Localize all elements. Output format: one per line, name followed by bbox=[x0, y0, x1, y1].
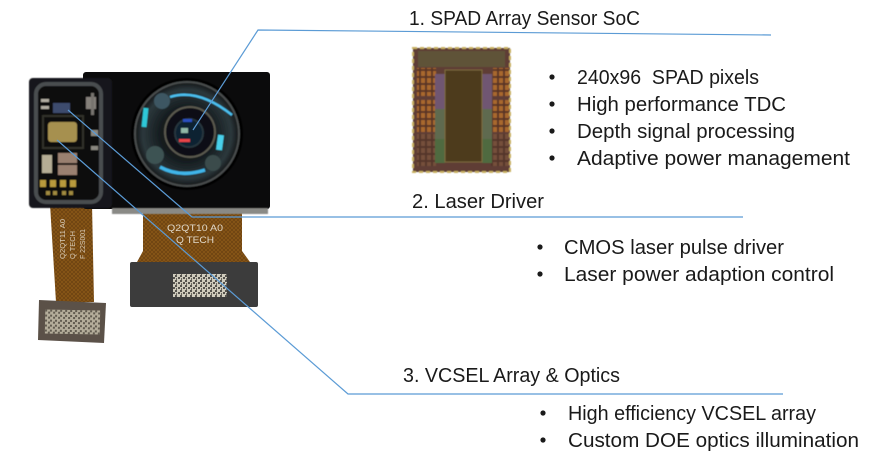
left illuminator board bbox=[29, 78, 112, 208]
callout line 1 bbox=[193, 30, 771, 130]
heading 1: 1. SPAD Array Sensor SoC bbox=[409, 8, 640, 30]
list 1: High performance TDC bbox=[577, 94, 786, 116]
driver chip bbox=[53, 103, 70, 113]
small components bbox=[86, 97, 96, 109]
list 1 bbox=[549, 67, 850, 170]
list 2: CMOS laser pulse driver bbox=[564, 237, 784, 259]
right flex cable bbox=[137, 206, 250, 262]
list 3: Custom DOE optics illumination bbox=[568, 430, 859, 452]
list 1: 240x96 SPAD pixels bbox=[577, 67, 759, 89]
heading 2: 2. Laser Driver bbox=[412, 191, 544, 213]
list 3: High efficiency VCSEL array bbox=[568, 403, 816, 425]
photo: sensor module bbox=[29, 72, 270, 343]
right data matrix bbox=[173, 274, 227, 297]
flex label right: Q TECH bbox=[176, 235, 214, 245]
left connector pad bbox=[38, 300, 106, 343]
flex label left: F 22S001 bbox=[80, 229, 87, 259]
list 1: Depth signal processing bbox=[577, 121, 795, 143]
lens bbox=[131, 78, 243, 190]
list 2: Laser power adaption control bbox=[564, 264, 834, 286]
list 3 bbox=[540, 403, 859, 452]
VCSEL package bbox=[48, 122, 77, 142]
left flex cable bbox=[50, 204, 94, 302]
list 1: Adaptive power management bbox=[577, 148, 850, 170]
right connector pad bbox=[130, 262, 258, 307]
callout line 2 bbox=[68, 110, 743, 217]
callout line 3 bbox=[57, 140, 783, 394]
photo: SPAD die bbox=[413, 48, 510, 172]
flex label left: Q TECH bbox=[70, 231, 77, 259]
flex label left bbox=[60, 219, 87, 259]
left data matrix bbox=[45, 310, 100, 334]
flex label left: Q2QT11 A0 bbox=[60, 219, 67, 259]
flex label right: Q2QT10 A0 bbox=[167, 223, 223, 233]
list 2 bbox=[537, 237, 834, 286]
main camera body bbox=[83, 72, 270, 209]
heading 3: 3. VCSEL Array & Optics bbox=[403, 365, 620, 387]
flex label right bbox=[167, 223, 223, 245]
